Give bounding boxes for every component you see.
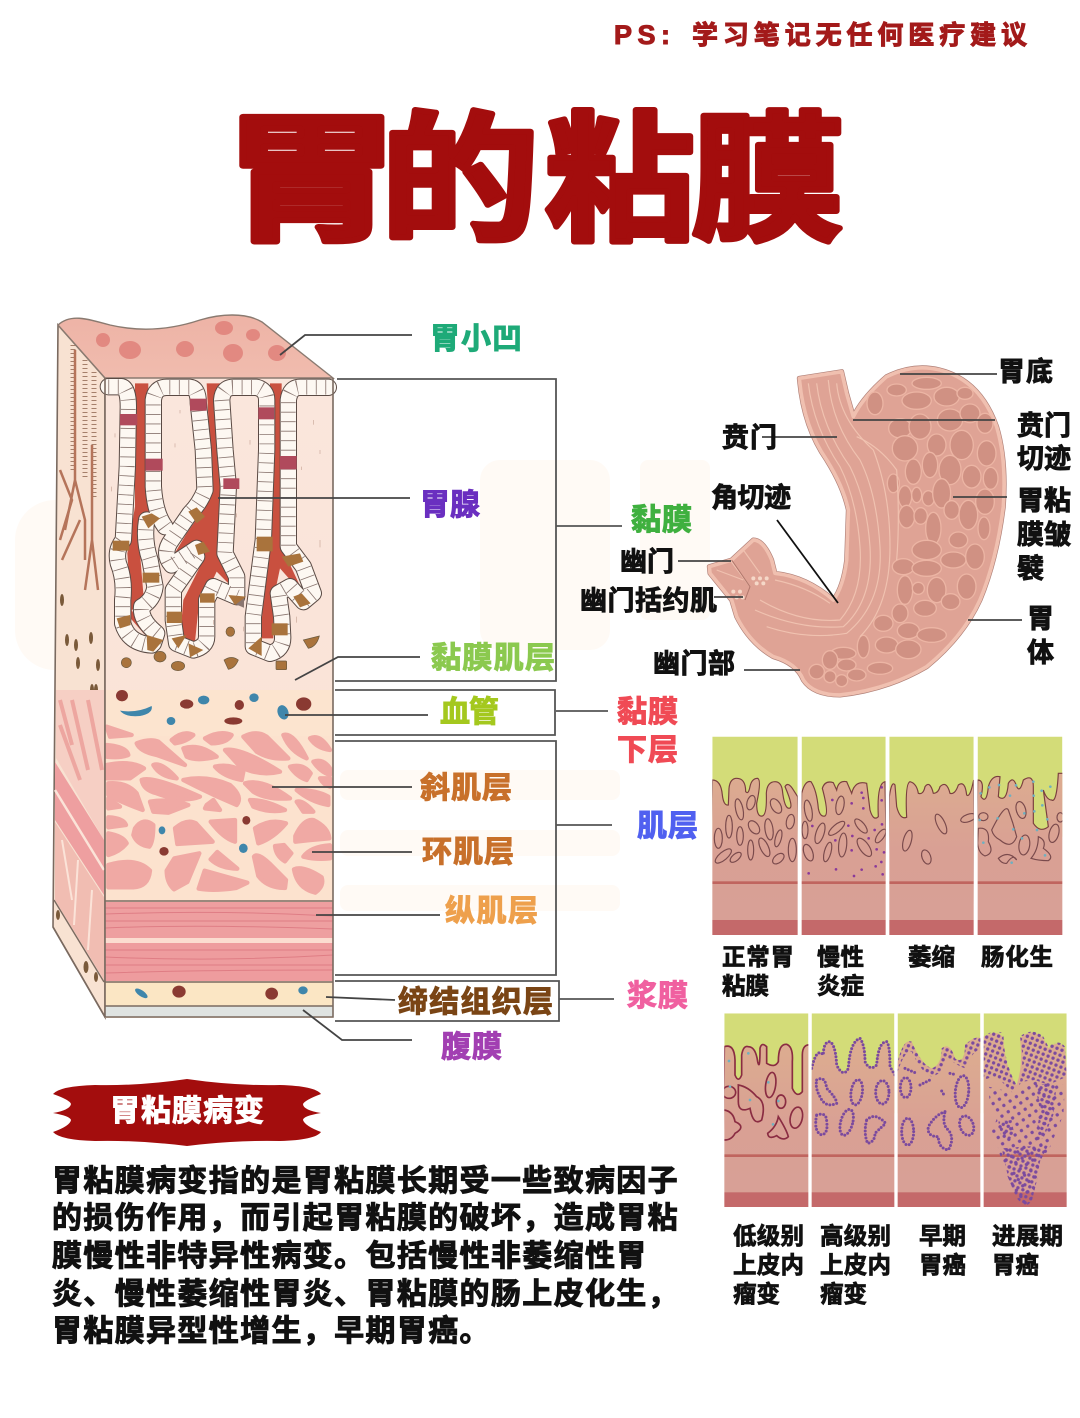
panel captions: lower row: 早期 [919, 1223, 966, 1249]
panel captions: lower row: 低级别 [733, 1223, 804, 1249]
panel: atrophy [889, 736, 974, 935]
gastric glands [108, 383, 328, 671]
panel captions: upper row: 慢性 [817, 944, 864, 970]
title: 胃 [222, 103, 401, 259]
panel captions: upper row: 粘膜 [722, 973, 769, 999]
label: 血管: 血管 [440, 696, 499, 729]
gastric pits top surface [58, 315, 333, 378]
leader lines [218, 335, 440, 1040]
chart: lower dysplasia and cancer panels [724, 1013, 1067, 1207]
block side face [53, 325, 105, 1017]
label: 黏膜下层 [617, 696, 678, 767]
label: 黏膜肌层: 黏膜肌层 [431, 642, 555, 675]
title: 粘 [545, 103, 695, 259]
title: 的 [381, 102, 539, 259]
disclaimer note: 学习笔记无任何医疗建议 [692, 20, 1027, 50]
label: 幽门部: 幽门部 [653, 649, 735, 679]
panel captions: lower row: 瘤变 [733, 1280, 780, 1307]
label: 浆膜: 浆膜 [627, 980, 688, 1013]
label: 黏膜下层: 黏膜 [617, 696, 678, 729]
panel captions: upper row: 萎缩 [908, 944, 955, 970]
title: 膜 [692, 103, 845, 260]
panel captions: lower row: 高级别 [820, 1223, 891, 1249]
text block: lesion description [52, 1165, 679, 1348]
panel captions: lower row: 上皮内 [820, 1252, 891, 1278]
panel captions: lower row: 胃癌 [919, 1252, 966, 1278]
label: 贲门切迹: 贲门 [1017, 411, 1071, 441]
stomach leader lines [678, 374, 1022, 670]
diagram: stomach wall cross-section block [53, 315, 333, 1018]
tumour cell mass [984, 1031, 1067, 1207]
panel captions: lower row: 胃癌 [992, 1252, 1039, 1278]
panel: intestinal metaplasia [978, 736, 1062, 935]
label: 角切迹: 角切迹 [711, 483, 791, 513]
text block: lesion description: 的损伤作用，而引起胃粘膜的破坏，造成胃粘 [52, 1202, 679, 1235]
panel captions: upper row [722, 944, 1053, 999]
label: 贲门切迹 [1017, 411, 1071, 474]
label: 胃粘膜皱襞: 膜皱 [1017, 520, 1071, 550]
label: 纵肌层: 纵肌层 [445, 895, 538, 928]
title [222, 102, 845, 260]
label: 贲门切迹: 切迹 [1017, 444, 1071, 474]
blood vessels and muscle fibres [107, 690, 330, 1000]
label: 黏膜下层: 下层 [617, 734, 678, 767]
label: 胃体 [1027, 604, 1054, 668]
block front face layers [105, 378, 333, 1018]
label: 胃体: 胃 [1027, 604, 1054, 634]
text block: lesion description: 炎、慢性萎缩性胃炎、胃粘膜的肠上皮化生， [52, 1278, 679, 1311]
text block: lesion description: 胃粘膜病变指的是胃粘膜长期受一些致病因子 [52, 1165, 679, 1198]
lamina propria cell specks [112, 410, 320, 631]
banner heading: 胃粘膜病变 [53, 1079, 321, 1146]
panel: low-grade neoplasia [724, 1013, 808, 1207]
panel captions: lower row: 上皮内 [733, 1252, 804, 1278]
gland tube outlines [108, 387, 328, 653]
panel: advanced gastric cancer [984, 1013, 1067, 1207]
panel: early gastric cancer [898, 1013, 980, 1207]
label: 缔结组织层: 缔结组织层 [398, 986, 553, 1019]
panel: normal mucosa [712, 736, 798, 935]
panel captions: upper row: 正常胃 [722, 944, 794, 970]
text block: lesion description: 膜慢性非特异性病变。包括慢性非萎缩性胃 [52, 1240, 648, 1273]
diagram: stomach anatomy [709, 368, 1004, 695]
panel: chronic gastritis [802, 736, 886, 935]
panel captions: lower row: 瘤变 [820, 1280, 867, 1307]
panel captions: lower row: 进展期 [992, 1223, 1063, 1249]
label: 胃小凹: 胃小凹 [430, 323, 522, 356]
faint background watermark [15, 460, 710, 911]
label: 胃粘膜皱襞: 襞 [1017, 554, 1044, 584]
layer brackets [335, 379, 622, 1021]
label: 胃体: 体 [1027, 638, 1054, 668]
label: 腹膜: 腹膜 [441, 1031, 502, 1064]
label: 肌层: 肌层 [637, 810, 698, 843]
panel captions: upper row: 肠化生 [981, 944, 1053, 970]
chart: upper mucosal lesion panels [712, 736, 1062, 935]
panel captions: upper row: 炎症 [817, 973, 864, 999]
label: 环肌层: 环肌层 [422, 836, 514, 869]
label: 黏膜: 黏膜 [631, 504, 692, 537]
text block: lesion description: 胃粘膜异型性增生，早期胃癌。 [52, 1315, 491, 1348]
pyloric sphincter dots [731, 576, 769, 599]
longitudinal folds [717, 380, 898, 637]
panel: high-grade neoplasia [812, 1013, 894, 1207]
label: 幽门: 幽门 [620, 547, 674, 577]
label: 贲门: 贲门 [722, 423, 777, 453]
label: 斜肌层: 斜肌层 [420, 772, 512, 805]
label: 胃腺: 胃腺 [420, 489, 480, 522]
panel captions: lower row [733, 1223, 1063, 1307]
label: 胃粘膜皱襞: 胃粘 [1017, 486, 1071, 516]
banner heading: 胃粘膜病变: 胃粘膜病变 [110, 1095, 264, 1128]
disclaimer note: PS: [614, 20, 670, 50]
label: 胃底: 胃底 [998, 357, 1053, 387]
mucosal fold cells [809, 377, 998, 687]
label: 幽门括约肌: 幽门括约肌 [580, 586, 717, 616]
label: 胃粘膜皱襞 [1017, 486, 1071, 584]
